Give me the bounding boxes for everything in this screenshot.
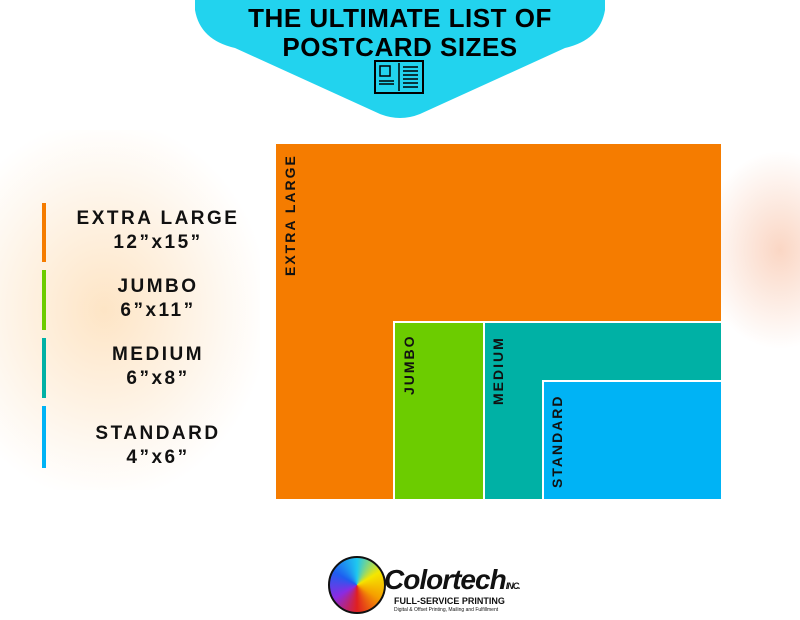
legend: extra large: EXTRA LARGE — [77, 208, 239, 229]
legend: standard — [42, 406, 221, 468]
title text: POSTCARD SIZES — [282, 32, 518, 62]
logo: colortech: Digital & Offset Printing, Mailing and Fulfillment — [394, 607, 498, 613]
rect: jumbo: JUMBO — [401, 334, 417, 395]
title text: THE ULTIMATE LIST OF — [248, 3, 552, 33]
logo: colortech — [328, 556, 520, 614]
icon: postcard — [374, 60, 424, 94]
rect: jumbo — [393, 321, 483, 499]
legend: medium: MEDIUM — [112, 344, 204, 365]
rect: medium: MEDIUM — [490, 336, 506, 405]
title text — [248, 3, 552, 62]
legend: jumbo: JUMBO — [117, 276, 199, 297]
legend: jumbo — [42, 270, 199, 330]
title banner — [195, 0, 605, 118]
legend: standard: 4”x6” — [126, 447, 190, 468]
legend: medium: 6”x8” — [126, 368, 190, 389]
rect: standard — [542, 380, 721, 499]
rect: extra large — [276, 144, 721, 499]
rect: medium — [483, 321, 721, 499]
logo: colortech: FULL-SERVICE PRINTING — [394, 596, 505, 606]
rect: standard: STANDARD — [549, 394, 565, 488]
size chart — [276, 144, 721, 499]
rect: extra large: EXTRA LARGE — [282, 154, 298, 276]
logo: colortech: ColortechINC. — [384, 564, 520, 595]
legend: extra large — [42, 203, 239, 262]
legend: medium — [42, 338, 204, 398]
legend: standard: STANDARD — [95, 423, 221, 444]
legend: jumbo: 6”x11” — [120, 300, 196, 321]
legend: extra large: 12”x15” — [113, 232, 203, 253]
background splashes — [0, 130, 260, 490]
